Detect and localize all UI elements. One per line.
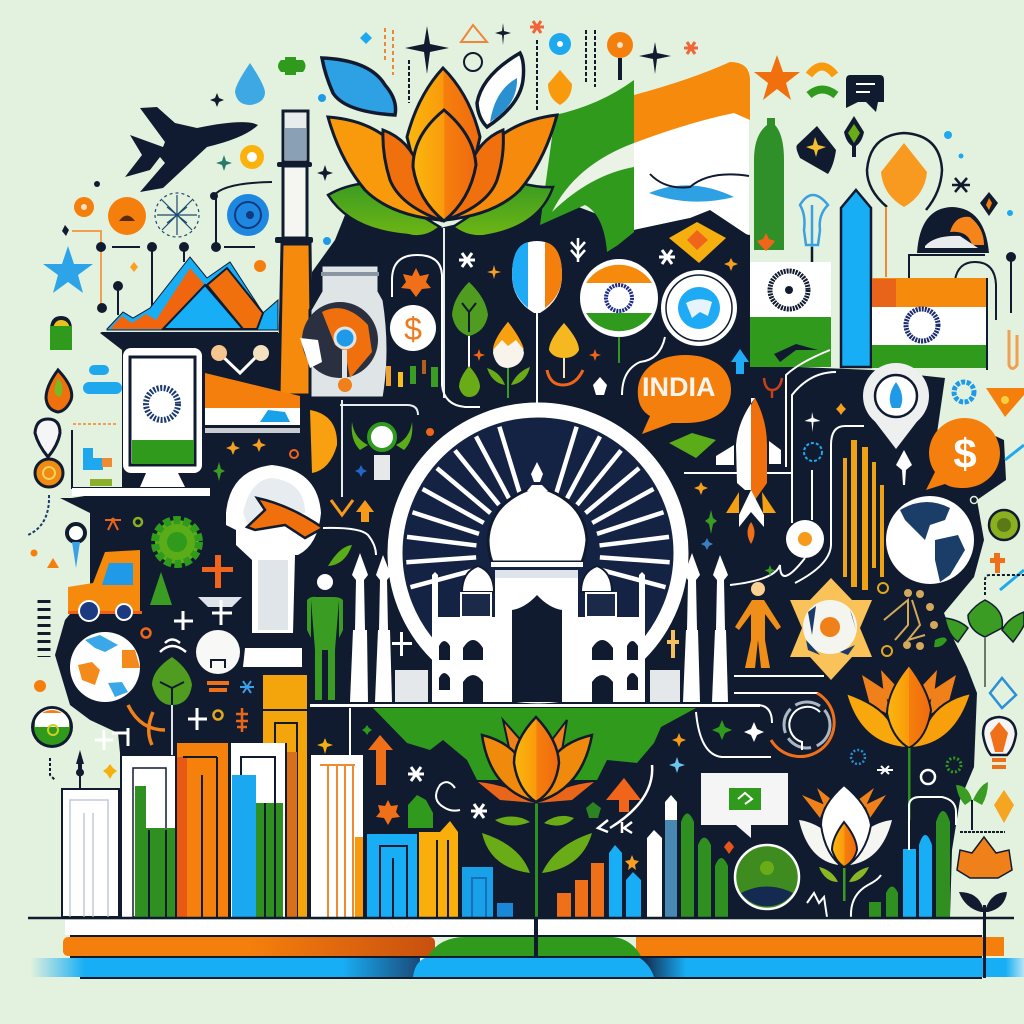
centre [887, 665, 931, 748]
icon: orange ring [74, 197, 94, 217]
minarets [350, 553, 728, 702]
top-left icons [43, 57, 333, 315]
icon: blue donut [549, 33, 571, 55]
petal outer right [445, 115, 557, 220]
icon: orange kite [669, 222, 726, 263]
icon: white pin [35, 419, 60, 457]
dome band [491, 562, 583, 578]
icon: blue pills [83, 365, 122, 394]
stem [535, 800, 538, 917]
icon: green cylinder [754, 118, 784, 250]
green bulb [352, 422, 412, 480]
leaves small [495, 816, 574, 826]
icon flower and shapes [376, 800, 400, 825]
bar chart left [62, 675, 363, 917]
right column [754, 55, 1017, 368]
plus decor center left [317, 708, 372, 755]
spread petals [478, 782, 594, 803]
green hill [428, 937, 641, 956]
icon: snow and plus [459, 233, 775, 361]
petal mid right [446, 130, 503, 220]
ring gauge [771, 693, 834, 757]
dashes [960, 831, 1005, 833]
stage bands [30, 905, 1024, 979]
icon: bulb outline with drop [867, 133, 942, 277]
flag banner [205, 373, 300, 433]
icon: water drop [235, 63, 265, 105]
icon: ring with blue cone [67, 524, 85, 568]
green gear [155, 520, 199, 564]
icon: diamond [796, 126, 836, 174]
green globe [735, 845, 799, 909]
platform under tablet [72, 488, 210, 496]
icon: network nodes [211, 345, 269, 373]
connector [622, 337, 665, 395]
chhatri bases [461, 593, 616, 617]
orange half disc [310, 410, 337, 473]
blue left [30, 958, 420, 977]
icon: orange flower [957, 837, 1012, 878]
icon: blue step block [83, 448, 112, 486]
icon: blue spark [240, 681, 254, 693]
bulb head monument [226, 465, 323, 667]
star of david [790, 578, 872, 680]
icon: orange tag [548, 70, 572, 105]
dark backdrop [55, 200, 1006, 917]
orange person [735, 582, 781, 668]
orange ring [142, 628, 150, 638]
snowflakes [408, 767, 487, 818]
icons mid left [142, 555, 242, 638]
icon: globe left [70, 632, 140, 702]
core [832, 822, 857, 867]
icon: small arrow and Y [593, 349, 782, 398]
side left [846, 693, 907, 748]
icon: tulip [487, 322, 530, 398]
dashed frame [72, 424, 122, 488]
mountain chart [100, 257, 278, 345]
icon: ladder [38, 600, 50, 657]
icon: green sprout [452, 282, 488, 397]
white band [65, 920, 982, 935]
icon: airplane [125, 107, 258, 192]
small marks above bars [50, 705, 248, 789]
baseline [28, 917, 1014, 919]
right dollar bubble [926, 418, 1000, 490]
icon: yellow diamond [994, 790, 1014, 823]
bar 6 [311, 755, 363, 917]
side petals [799, 820, 892, 865]
bar 2 [122, 756, 175, 917]
yellow bars [843, 440, 884, 590]
icon: dome [917, 207, 989, 253]
connector right [955, 253, 1017, 368]
bar 4 [231, 743, 285, 917]
petal mid left [383, 130, 440, 220]
left flag circle [31, 706, 73, 748]
icon: striped oval [512, 241, 562, 403]
globe right [886, 496, 974, 584]
icon: small navy plus [210, 93, 224, 107]
icon: green cross [278, 57, 306, 75]
centre petal [821, 785, 871, 868]
white connectors [786, 350, 836, 417]
icon: blue tall arrow [841, 190, 871, 367]
icon: navy sprout [959, 892, 1007, 977]
finial [527, 462, 548, 491]
icon: green box [50, 316, 72, 350]
icon: multi colour leaf [46, 370, 72, 412]
white plus [174, 600, 232, 630]
icon: yellow pin [240, 145, 264, 169]
icon: green sprout [956, 782, 988, 830]
india map [373, 708, 696, 780]
top marks [360, 21, 698, 110]
icon: small marks [944, 131, 1013, 216]
chat flag [701, 773, 788, 838]
right dollar bubble: $ [953, 430, 977, 477]
globe [300, 302, 378, 392]
icon: dashed curve [28, 495, 49, 535]
icon: orange triangle [986, 388, 1024, 417]
connector from monument [323, 528, 376, 555]
mini bars [386, 360, 438, 387]
white blue petal [477, 53, 524, 127]
white lines right [684, 400, 864, 757]
blue centre [413, 958, 654, 977]
lotus right [846, 665, 971, 820]
propeller [202, 555, 233, 588]
far right bars [869, 811, 950, 917]
icon: blue marks [1000, 445, 1024, 590]
icon: star [754, 55, 800, 100]
icon: orange pin [607, 32, 633, 80]
flag waving [634, 62, 750, 240]
back petals [503, 720, 567, 775]
small domes [462, 566, 612, 592]
portal [495, 578, 578, 702]
green house [408, 795, 433, 828]
side blocks [395, 670, 680, 702]
ashoka wheel [395, 410, 681, 696]
green person [307, 574, 343, 700]
right side icons [956, 678, 1016, 977]
orange dashes [385, 28, 393, 75]
bar 1 [62, 789, 119, 917]
circuit nodes [62, 181, 221, 313]
lotus stem [443, 228, 445, 398]
leaf right [453, 183, 553, 236]
petal front [413, 110, 476, 221]
yellow framed bar [263, 675, 307, 917]
leaf white [571, 238, 585, 262]
left icons [28, 316, 122, 692]
ground line [310, 704, 760, 707]
white circle disc [786, 520, 824, 558]
icon: bulb [196, 630, 240, 690]
white lotus [799, 785, 892, 901]
green plants right [945, 600, 1024, 687]
right edge icons [954, 382, 1024, 595]
small orange marks [30, 550, 59, 692]
dome [488, 488, 587, 562]
main arch [512, 595, 562, 702]
taj mahal [432, 462, 645, 702]
icon: orange flower [401, 268, 431, 297]
white arrow mark [598, 765, 652, 833]
bar blue 2 [462, 867, 493, 917]
truck [68, 550, 142, 621]
icon: navy stars [405, 23, 671, 74]
connector with arrows [331, 400, 418, 515]
icon: orange disc [35, 459, 63, 487]
icon: chat [846, 75, 884, 112]
icon: flag right [872, 278, 988, 370]
leaf left [328, 183, 440, 236]
flag green swoosh [540, 80, 634, 252]
back petals [862, 670, 956, 715]
blue diamond [360, 32, 372, 44]
icon: blue star [43, 246, 93, 293]
icon: orange snow marks [530, 21, 698, 54]
right bar chart [557, 795, 734, 917]
windows [439, 640, 638, 702]
rocket surroundings [392, 403, 912, 658]
icon: arcs [809, 66, 836, 95]
icon: globe badge [661, 270, 737, 346]
orange arrow centre [606, 778, 641, 812]
icon: up arrow small [356, 500, 374, 522]
icon: green face [989, 510, 1019, 540]
side petals [482, 735, 592, 802]
connector curve [392, 255, 480, 407]
icon: teal plus [216, 155, 232, 171]
icon: blue lyre [800, 195, 828, 262]
icon: blue diamond [990, 678, 1016, 708]
bar chart center [367, 735, 513, 917]
side right [911, 693, 971, 748]
petal outer left [328, 117, 440, 220]
icon: square flag [750, 262, 831, 367]
tablet [123, 348, 202, 487]
dashed bracket [985, 575, 1024, 595]
icon: sketched network [155, 193, 199, 237]
petal centre back [407, 68, 480, 180]
green leaf [328, 545, 352, 566]
tiny icons left centre [105, 428, 434, 530]
middle row badges [300, 222, 988, 417]
dollar coin: $ [404, 311, 422, 347]
icon: india flag circle [580, 259, 658, 363]
stems [534, 918, 538, 957]
lotus top [328, 68, 557, 236]
chimney tower [275, 111, 313, 395]
jar [310, 265, 388, 398]
small dots [878, 496, 978, 656]
blue right [640, 958, 1024, 977]
leaves [819, 867, 869, 882]
centre petal [514, 717, 559, 802]
icon: blue gear [954, 382, 974, 402]
india speech bubble: INDIA [642, 372, 716, 402]
tan network [884, 589, 938, 650]
bar 3 [177, 743, 228, 917]
vertical dashes [409, 30, 595, 110]
white connector right [807, 797, 956, 917]
green house [150, 572, 172, 605]
icon: green leaf [152, 640, 192, 755]
icon: bulb right [983, 717, 1016, 767]
c-curve [436, 782, 460, 811]
leaves lower [482, 833, 592, 873]
white wings [198, 597, 242, 607]
india speech bubble [638, 355, 731, 434]
circuit lines [72, 182, 272, 315]
small map icons [669, 720, 961, 784]
icon: blue badge [227, 194, 269, 236]
bar yellow [419, 821, 458, 917]
bottom lotus [478, 717, 594, 917]
orange right [636, 937, 1004, 956]
bar blue [367, 834, 417, 917]
icon: green leaf diamond [844, 116, 864, 157]
blue leaf [322, 58, 396, 115]
small colour dots [130, 94, 333, 272]
orange left [63, 937, 435, 956]
side wings [432, 572, 645, 702]
small orange petals [802, 788, 886, 818]
orange arrow [368, 735, 393, 785]
dollar coin [390, 305, 436, 351]
gear badge [863, 363, 929, 449]
rocket [726, 398, 776, 544]
panel behind flag [909, 255, 985, 280]
icon: orange plus [990, 553, 1005, 573]
bar blue 3 [497, 903, 513, 917]
icon: orange target [108, 197, 146, 235]
icon: ring and kite [461, 25, 487, 71]
icon: yellow bud [547, 323, 583, 385]
